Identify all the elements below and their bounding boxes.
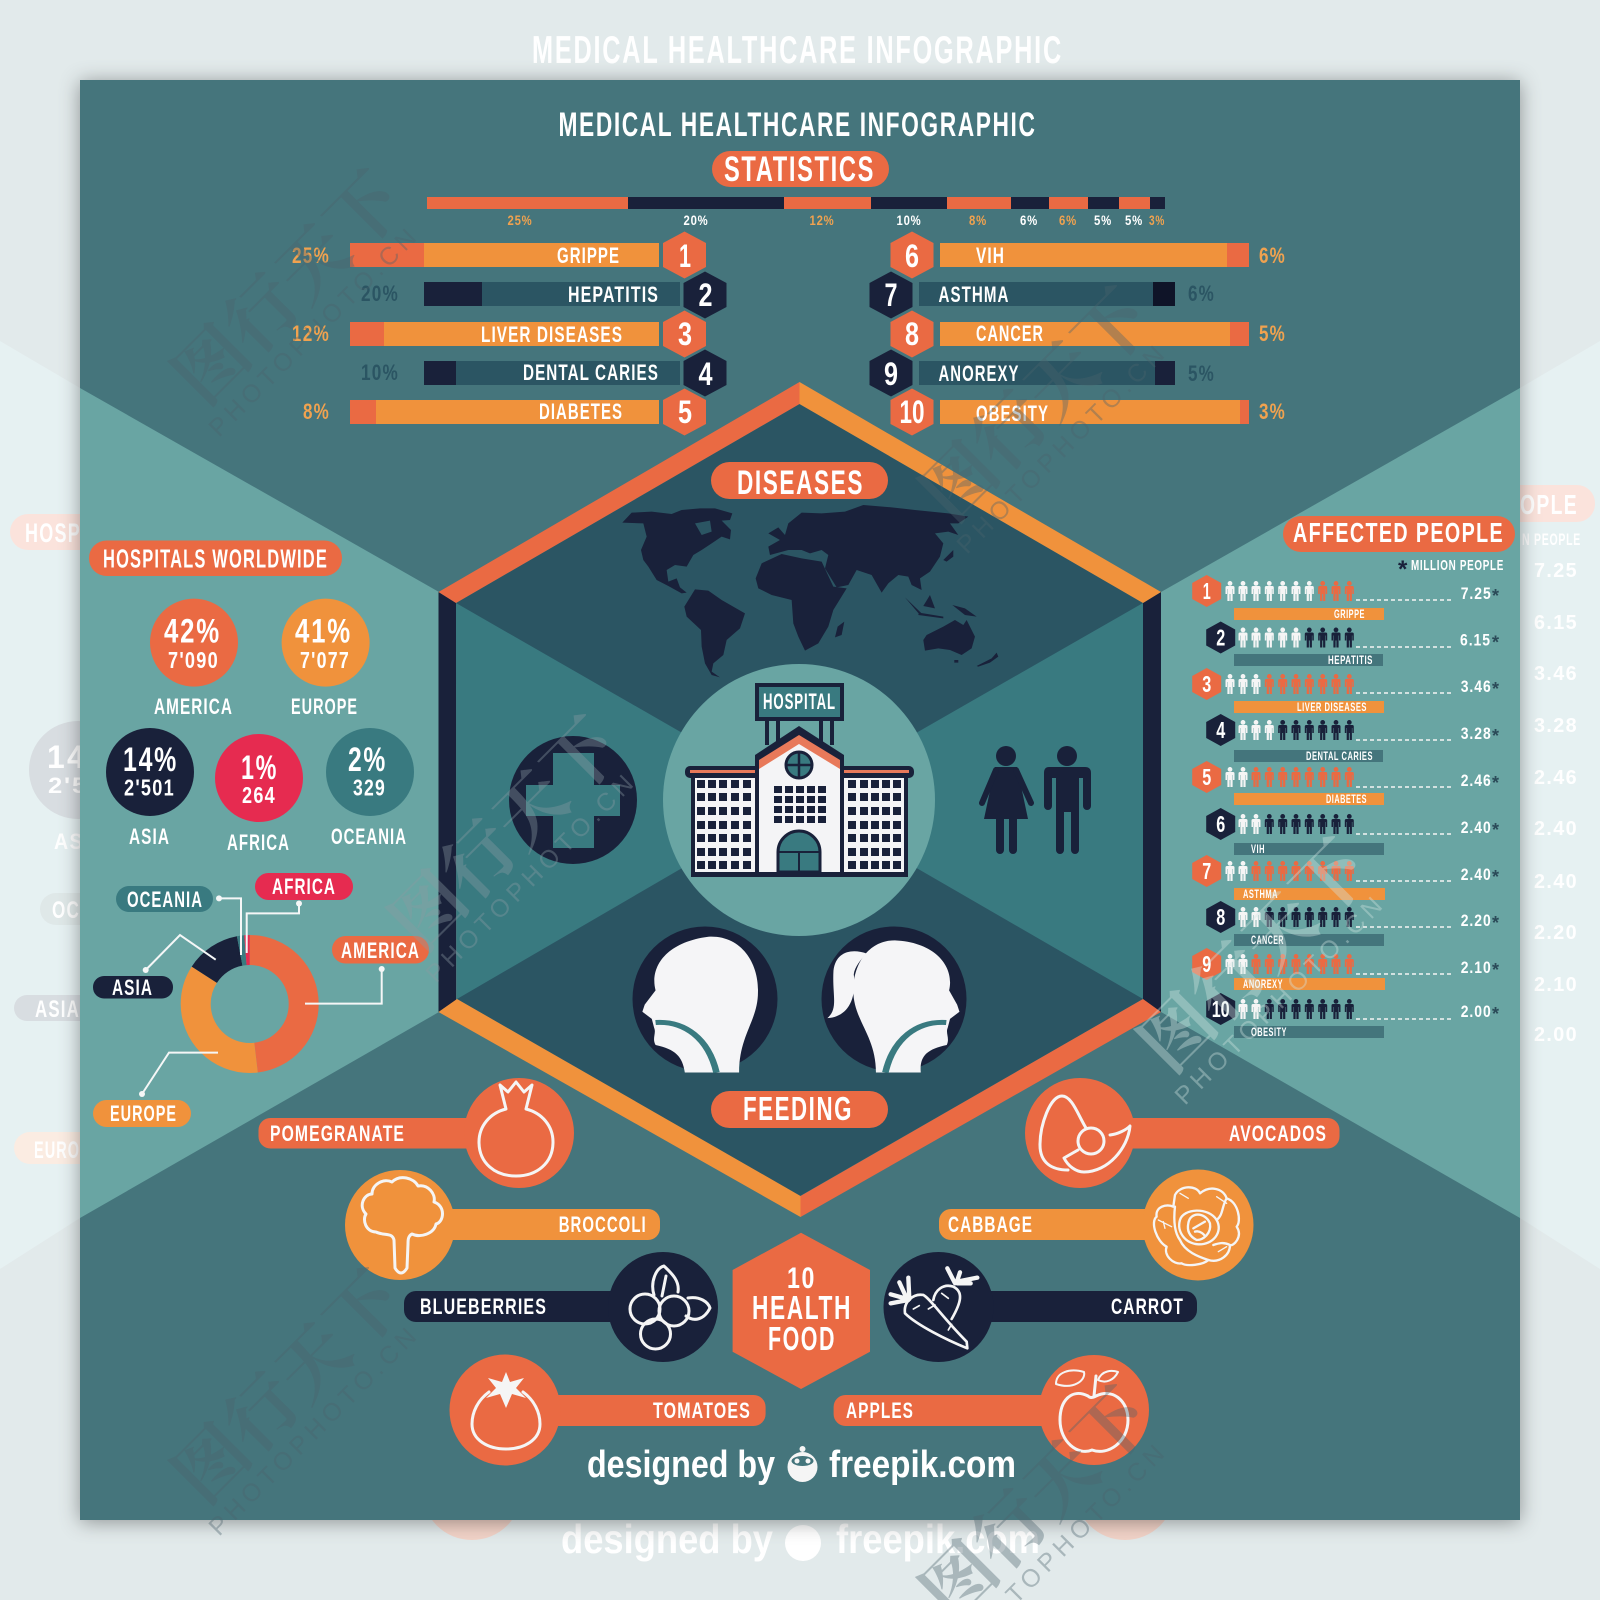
freepik credit: freepik.com — [829, 1444, 1016, 1486]
left light triangle — [80, 388, 439, 1218]
affected row 4: dental caries: DENTAL CARIES — [1306, 749, 1373, 763]
right light triangle — [1161, 388, 1520, 1218]
ghost right items: 2.10 — [1534, 974, 1578, 996]
disease bars left — [292, 243, 680, 424]
affected row 5: diabetes — [1192, 761, 1500, 806]
food: broccoli: BROCCOLI — [559, 1212, 647, 1237]
affected row 4: dental caries: * — [1492, 726, 1500, 746]
circle: Africa — [215, 734, 303, 855]
affected row 1: grippe: * — [1492, 586, 1500, 606]
watermarks: PHOTOPHOTO.CN — [951, 341, 1170, 559]
circle: America — [150, 599, 238, 719]
world map — [622, 505, 998, 677]
affected people heading — [1283, 516, 1515, 552]
affected row 6: VIH: VIH — [1251, 842, 1265, 856]
affected row 5: diabetes: 5 — [1202, 764, 1211, 790]
ghost bottom items — [422, 1440, 1175, 1562]
number hexagons right: 9 — [884, 356, 898, 392]
food: broccoli — [345, 1170, 660, 1280]
ghost right items: 2.20 — [1534, 922, 1578, 944]
circle: Asia: 14% — [123, 741, 178, 779]
affected row 3: liver diseases: 3.46 — [1461, 677, 1492, 696]
watermarks: 图行天下 — [907, 275, 1168, 536]
diseases heading — [711, 462, 888, 502]
10 health food badge: FOOD — [768, 1320, 836, 1357]
food: avocados: AVOCADOS — [1229, 1121, 1327, 1146]
disease bars right: 6% — [1259, 243, 1286, 268]
affected row 1: grippe: GRIPPE — [1334, 607, 1365, 621]
circle: Asia: 2'501 — [124, 774, 175, 800]
affected row 8: cancer: CANCER — [1251, 933, 1284, 947]
label: Europe: EUROPE — [110, 1101, 177, 1126]
affected row 2: hepatitis: HEPATITIS — [1328, 653, 1373, 667]
watermarks: PHOTOPHOTO.CN — [203, 1323, 422, 1541]
affected row 9: anorexy: 9 — [1202, 951, 1211, 977]
disease bars left: HEPATITIS — [568, 282, 659, 307]
ghost right items: 6.15 — [1534, 612, 1578, 634]
disease bars left: DENTAL CARIES — [523, 360, 659, 385]
ghost left items: 2'5 — [48, 773, 88, 798]
affected row 9: anorexy: * — [1492, 960, 1500, 980]
affected row 8: cancer: 2.20 — [1461, 911, 1492, 930]
number hexagons right: 6 — [905, 238, 919, 274]
food: cabbage — [939, 1170, 1254, 1280]
affected row 3: liver diseases — [1192, 668, 1500, 714]
label: Europe — [93, 1100, 191, 1127]
affected row 5: diabetes: 2.46 — [1461, 771, 1492, 790]
affected row 7: asthma: 2.40 — [1461, 865, 1492, 884]
label: Africa — [255, 873, 353, 900]
ghost left items: AS — [54, 829, 84, 854]
affected row 5: diabetes: * — [1492, 773, 1500, 793]
disease bars right: 5% — [1188, 361, 1215, 386]
affected row 6: VIH: 2.40 — [1461, 818, 1492, 837]
ghost left items — [10, 514, 130, 1164]
affected row 10: obesity: OBESITY — [1251, 1025, 1287, 1039]
disease bars left: 12% — [292, 321, 330, 346]
affected row 8: cancer: 8 — [1216, 904, 1225, 930]
donut chart — [196, 950, 304, 1058]
number hexagons right: 7 — [884, 277, 898, 313]
10 health food badge: 10 — [787, 1262, 816, 1295]
ghost right items: 2.00 — [1534, 1024, 1578, 1046]
ghost right items: 2.46 — [1534, 767, 1578, 789]
affected row 4: dental caries: 3.28 — [1461, 724, 1492, 743]
number hexagons right: 10 — [900, 394, 924, 430]
ghost bottom items: freepik.com — [836, 1516, 1040, 1562]
disease bars left: DIABETES — [539, 399, 623, 424]
hospitals worldwide heading — [89, 540, 342, 576]
ghost reflected title: MEDICAL HEALTHCARE INFOGRAPHIC — [532, 29, 1063, 72]
circle: America: AMERICA — [154, 694, 233, 719]
affected row 7: asthma: ASTHMA — [1243, 887, 1278, 901]
affected row 8: cancer: * — [1492, 913, 1500, 933]
million people note: * — [1398, 556, 1409, 583]
watermarks: PHOTOPHOTO.CN — [1169, 892, 1388, 1110]
ghost right items: 3.28 — [1534, 715, 1578, 737]
food: carrot — [884, 1252, 1197, 1362]
ghost right items: 2.40 — [1534, 818, 1578, 840]
label: Asia: ASIA — [112, 975, 153, 1000]
affected row 7: asthma — [1192, 855, 1500, 901]
affected row 4: dental caries: 4 — [1216, 717, 1225, 743]
disease bars left: 25% — [292, 243, 330, 268]
central hexagon — [438, 382, 1161, 1217]
stacked percentage bar — [427, 197, 1165, 228]
ghost left items: ASIA — [35, 996, 80, 1023]
label: Africa: AFRICA — [272, 874, 336, 899]
circle: Europe: EUROPE — [291, 694, 358, 719]
affected row 5: diabetes: DIABETES — [1326, 792, 1367, 806]
watermarks: PHOTOPHOTO.CN — [420, 770, 639, 988]
diseases heading: DISEASES — [737, 464, 864, 502]
freepik credit — [587, 1444, 1016, 1486]
ghost left items: EURO — [34, 1137, 80, 1164]
affected row 9: anorexy: 2.10 — [1461, 958, 1492, 977]
affected row 3: liver diseases: LIVER DISEASES — [1297, 700, 1367, 714]
food: pomegranate: POMEGRANATE — [270, 1121, 405, 1146]
stacked percentage bar: 10% — [896, 212, 922, 228]
affected row 10: obesity: * — [1492, 1004, 1500, 1024]
disease bars right: ASTHMA — [938, 282, 1010, 307]
watermarks: PHOTOPHOTO.CN — [203, 224, 422, 442]
hospital building: HOSPITAL — [763, 689, 836, 714]
freepik credit: designed by — [587, 1444, 775, 1486]
food: tomatoes — [450, 1354, 766, 1466]
food: tomatoes: TOMATOES — [653, 1398, 751, 1423]
label: Oceania: OCEANIA — [127, 887, 203, 912]
affected row 6: VIH — [1206, 808, 1500, 856]
affected row 2: hepatitis: * — [1492, 632, 1500, 652]
disease bars left: GRIPPE — [557, 243, 620, 268]
food: apples: APPLES — [846, 1398, 914, 1423]
10 health food badge: HEALTH — [752, 1289, 852, 1326]
affected row 7: asthma: 7 — [1202, 858, 1211, 884]
affected row 10: obesity: 2.00 — [1461, 1002, 1492, 1021]
number hexagons left: 1 — [679, 238, 691, 274]
disease bars right: 6% — [1188, 281, 1215, 306]
circle: Oceania — [326, 728, 414, 849]
ghost bottom items: designed by — [561, 1516, 773, 1562]
circle: Europe: 41% — [295, 613, 352, 651]
food: pomegranate — [258, 1078, 574, 1188]
affected row 9: anorexy — [1192, 948, 1500, 991]
label: America: AMERICA — [341, 938, 420, 963]
circle: Oceania: 2% — [348, 741, 387, 779]
stacked percentage bar: 8% — [969, 212, 987, 228]
affected row 6: VIH: 6 — [1216, 811, 1225, 837]
hospital building — [685, 685, 914, 877]
label: America — [332, 936, 429, 964]
affected row 3: liver diseases: * — [1492, 679, 1500, 699]
affected row 2: hepatitis: 2 — [1216, 624, 1225, 650]
stacked percentage bar: 25% — [508, 212, 532, 228]
disease bars left: 10% — [361, 360, 399, 385]
affected row 1: grippe — [1192, 575, 1500, 621]
watermarks — [159, 158, 1388, 1600]
cross icon — [509, 736, 637, 864]
watermarks: 图行天下 — [159, 158, 420, 419]
disease bars right: 5% — [1259, 321, 1286, 346]
circle: Africa: AFRICA — [227, 830, 290, 855]
stacked percentage bar: 5% — [1094, 212, 1112, 228]
disease bars right: ANOREXY — [938, 361, 1020, 386]
circle: Europe: 7'077 — [300, 647, 350, 673]
affected row 2: hepatitis: 6.15 — [1460, 630, 1491, 650]
watermarks: 图行天下 — [1125, 826, 1386, 1087]
head profile female — [822, 926, 966, 1072]
disease bars right: OBESITY — [976, 401, 1049, 426]
ghost right items: 3.46 — [1534, 663, 1578, 685]
donut leader lines — [139, 895, 385, 1097]
hospital circle — [663, 664, 935, 936]
ghost light bands — [0, 341, 1600, 1269]
stacked percentage bar: 6% — [1059, 212, 1077, 228]
affected row 4: dental caries — [1206, 714, 1500, 763]
affected row 10: obesity: 10 — [1212, 996, 1230, 1022]
circle: Africa: 264 — [242, 782, 276, 808]
stacked percentage bar: 5% — [1125, 212, 1143, 228]
number hexagons left — [663, 232, 726, 436]
affected row 1: grippe: 1 — [1203, 578, 1211, 604]
number hexagons left: 2 — [698, 277, 712, 313]
feeding heading: FEEDING — [743, 1090, 853, 1127]
circle: Oceania: 329 — [353, 774, 386, 800]
10 health food badge — [733, 1233, 870, 1389]
circle: Europe — [282, 599, 370, 719]
disease bars left: 8% — [303, 399, 330, 424]
ghost right items — [1470, 485, 1595, 1046]
million people note: MILLION PEOPLE — [1411, 557, 1504, 574]
number hexagons right: 8 — [905, 316, 919, 352]
statistics heading: STATISTICS — [724, 150, 875, 189]
ghost left items: HOSP — [25, 518, 81, 548]
food: blueberries — [404, 1252, 718, 1362]
hospitals worldwide heading: HOSPITALS WORLDWIDE — [103, 544, 328, 574]
title: MEDICAL HEALTHCARE INFOGRAPHIC — [558, 106, 1036, 144]
disease bars right: VIH — [976, 243, 1005, 268]
circle: America: 7'090 — [168, 647, 219, 673]
affected people heading: AFFECTED PEOPLE — [1293, 517, 1504, 548]
ghost left items: 14 — [47, 739, 87, 775]
food: apples — [834, 1355, 1149, 1465]
people icon: woman and man — [982, 746, 1091, 854]
number hexagons left: 4 — [698, 356, 713, 392]
food: cabbage: CABBAGE — [948, 1212, 1033, 1237]
disease bars right — [919, 243, 1286, 426]
affected row 10: obesity — [1206, 993, 1500, 1039]
stacked percentage bar: 6% — [1020, 212, 1038, 228]
ghost right items: 7.25 — [1534, 560, 1578, 582]
ghost right items: 2.40 — [1534, 871, 1578, 893]
number hexagons left: 3 — [678, 316, 692, 352]
stacked percentage bar: 20% — [684, 212, 708, 228]
affected row 7: asthma: * — [1492, 867, 1500, 887]
disease bars right: 3% — [1259, 399, 1286, 424]
number hexagons left: 5 — [678, 394, 692, 430]
number hexagons right — [870, 232, 934, 436]
head profile male — [632, 926, 778, 1072]
circle: Oceania: OCEANIA — [331, 824, 407, 849]
affected row 1: grippe: 7.25 — [1461, 584, 1492, 603]
disease bars right: CANCER — [976, 321, 1044, 346]
food: avocados — [1025, 1078, 1340, 1188]
disease bars left: LIVER DISEASES — [481, 322, 623, 347]
stacked percentage bar: 3% — [1149, 212, 1165, 228]
million people note — [1398, 556, 1504, 583]
affected row 8: cancer — [1206, 901, 1500, 947]
affected row 3: liver diseases: 3 — [1202, 671, 1211, 697]
circle: America: 42% — [164, 613, 221, 651]
circle: Asia: ASIA — [129, 824, 170, 849]
circle: Africa: 1% — [241, 749, 278, 787]
affected row 9: anorexy: ANOREXY — [1243, 977, 1283, 991]
watermarks: 图行天下 — [159, 1257, 420, 1518]
food: carrot: CARROT — [1111, 1294, 1184, 1319]
ghost left items: OC — [52, 897, 80, 924]
watermarks: 图行天下 — [376, 704, 637, 965]
affected row 2: hepatitis — [1206, 622, 1500, 667]
food: blueberries: BLUEBERRIES — [420, 1294, 547, 1319]
disease bars left: 20% — [361, 281, 399, 306]
circle: Asia — [106, 728, 194, 849]
stacked percentage bar: 12% — [810, 212, 834, 228]
affected row 6: VIH: * — [1492, 820, 1500, 840]
label: Oceania — [116, 886, 213, 912]
